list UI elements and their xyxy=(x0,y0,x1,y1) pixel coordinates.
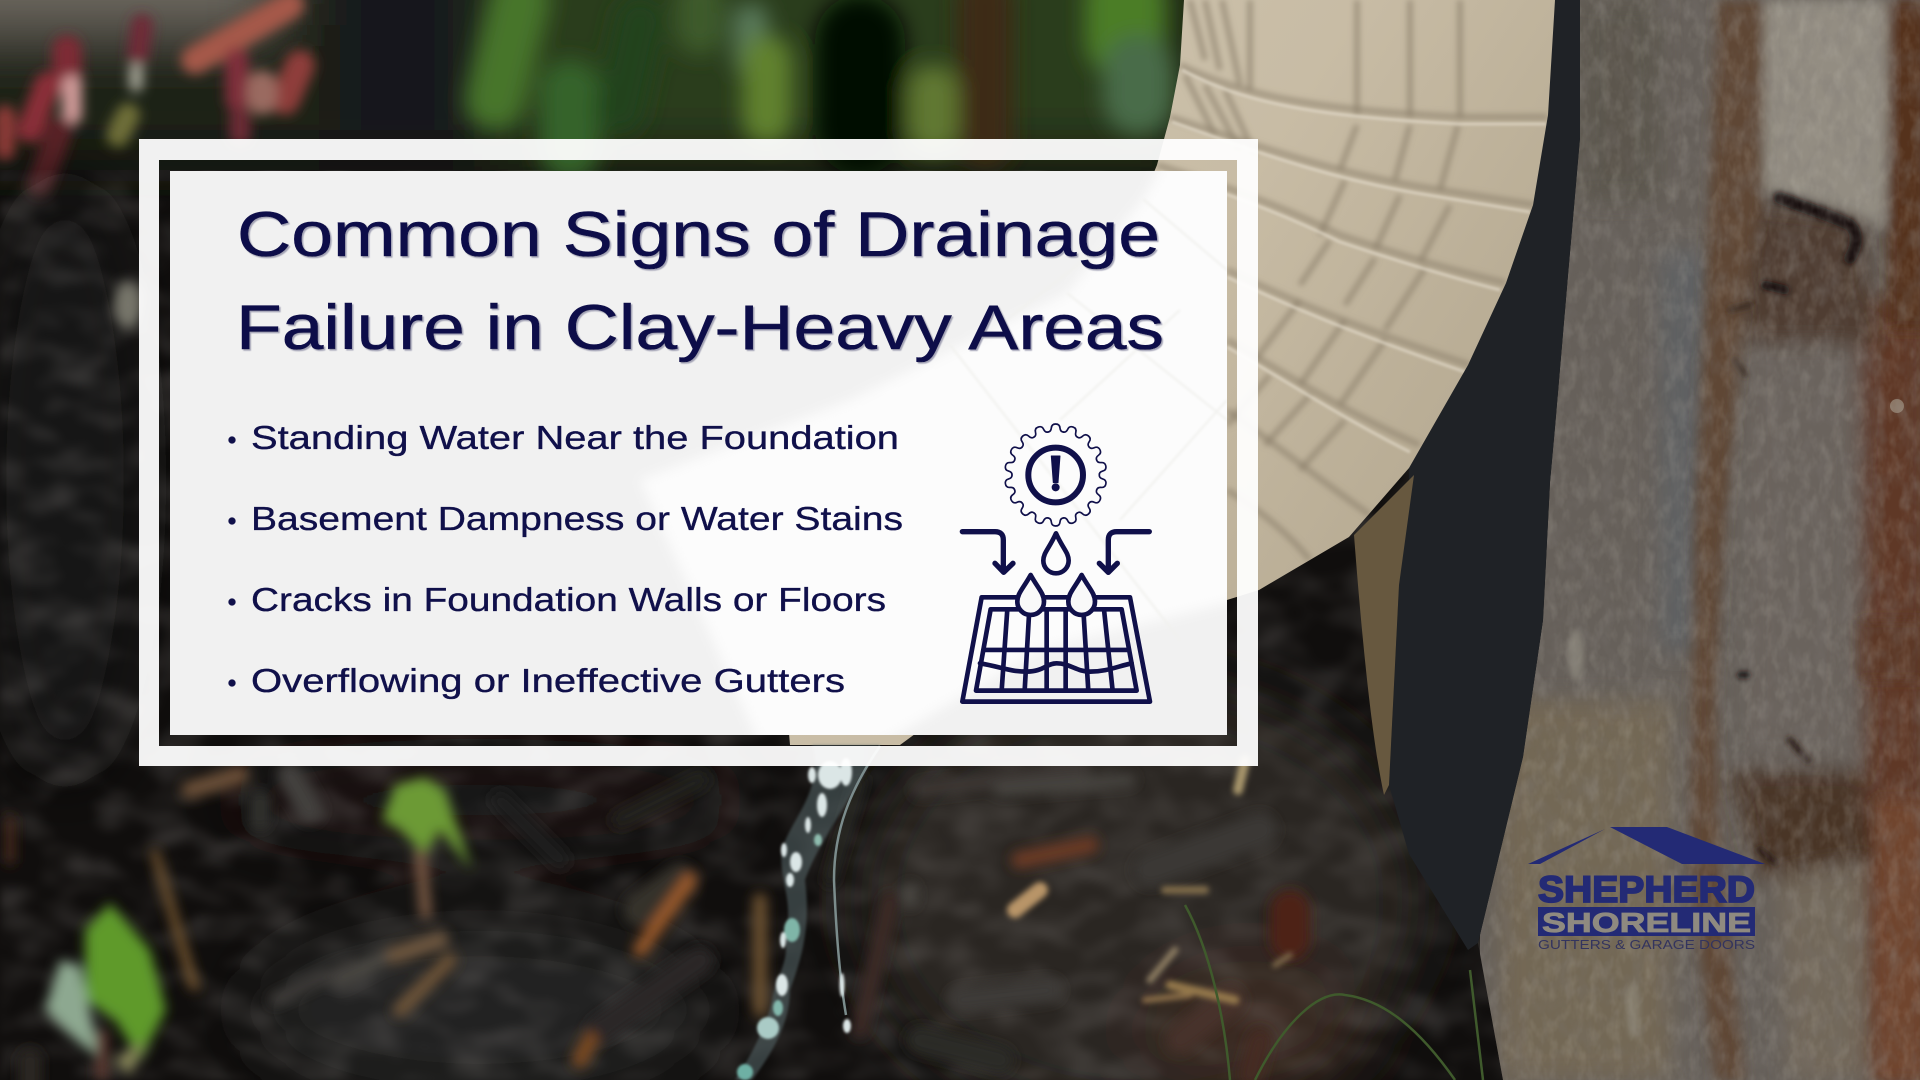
logo roof xyxy=(1528,827,1765,864)
panel body xyxy=(170,150,1240,745)
title xyxy=(236,200,1164,363)
bullet list: Cracks in Foundation Walls or Floors xyxy=(251,581,886,618)
tan rock sliver xyxy=(1354,475,1414,795)
icon: drainage grate with warning gear xyxy=(962,424,1150,702)
logo text: SHEPHERD xyxy=(1538,869,1755,910)
logo: Shepherd Shoreline: SHORELINE xyxy=(1542,907,1751,938)
bullet list: Overflowing or Ineffective Gutters xyxy=(251,662,845,699)
green seedlings xyxy=(45,777,472,1080)
grate xyxy=(962,575,1150,702)
logo tagline: GUTTERS & GARAGE DOORS xyxy=(1538,937,1755,952)
bullet list xyxy=(228,419,903,699)
stone wall xyxy=(1478,0,1920,1080)
bullet list: Basement Dampness or Water Stains xyxy=(251,500,903,537)
warning circle xyxy=(1028,448,1083,502)
logo band xyxy=(1538,907,1755,936)
arrows and falling drop xyxy=(962,532,1149,573)
title: Failure in Clay-Heavy Areas xyxy=(236,293,1164,363)
rib highlights xyxy=(1160,70,1546,452)
gear teeth outline xyxy=(1004,424,1107,526)
grass blades xyxy=(1185,905,1483,1080)
downspout xyxy=(770,0,1555,745)
title: Common Signs of Drainage xyxy=(237,200,1160,270)
water stream xyxy=(735,745,880,1080)
blurred mulch ground xyxy=(0,152,1502,1080)
logo: Shepherd Shoreline xyxy=(1528,827,1765,952)
shadowed stone under spout xyxy=(1389,0,1580,950)
panel frame xyxy=(139,139,1258,766)
panel: text card xyxy=(139,139,1258,766)
bullet list: Standing Water Near the Foundation xyxy=(251,419,899,456)
rib shadows xyxy=(1157,0,1548,560)
blurred foliage at top xyxy=(0,0,1200,185)
